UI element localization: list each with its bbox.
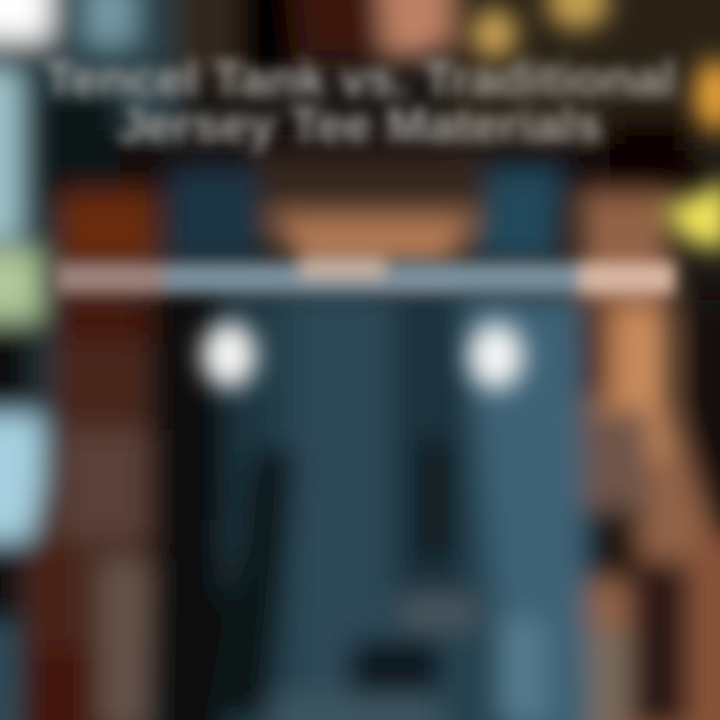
title: Jersey Tee Materials (117, 97, 603, 153)
title (40, 51, 682, 160)
right arm (580, 195, 720, 720)
left edge background (0, 0, 55, 720)
right edge (690, 300, 720, 720)
horizontal pale band (55, 256, 675, 294)
title: Tencel Tank vs. Traditional (44, 51, 676, 107)
bokeh lights (470, 0, 720, 250)
dark panel behind title (40, 140, 680, 200)
tank body (145, 290, 590, 720)
tank straps (165, 170, 270, 262)
chest skin (265, 210, 480, 268)
tank buttons (201, 321, 524, 390)
left arm (20, 190, 160, 720)
white patch top left (0, 0, 50, 40)
